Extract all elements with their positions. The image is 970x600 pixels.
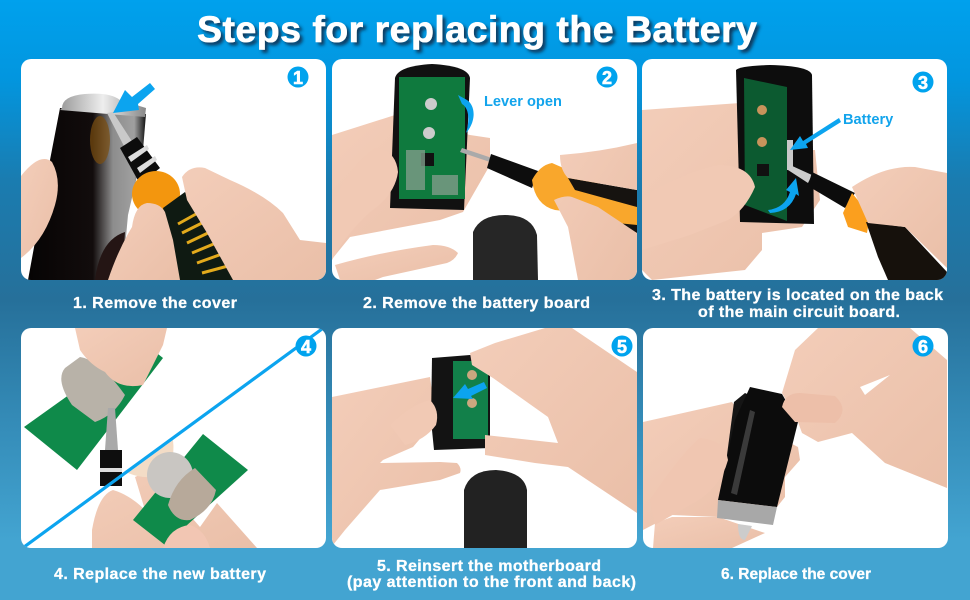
curved arrow [768, 178, 799, 213]
lower device [473, 215, 538, 280]
number badge 4: 4 [301, 337, 311, 357]
caption 6: 6. Replace the cover [721, 566, 871, 583]
lower holder [168, 468, 216, 520]
number badge 1 [288, 66, 308, 88]
thumb [332, 148, 398, 260]
label: lever open: Lever open [484, 94, 562, 110]
number badge 3: 3 [918, 73, 928, 93]
tool [100, 408, 122, 486]
right hand [554, 143, 637, 280]
lower hand [92, 470, 257, 548]
coin battery [147, 452, 193, 498]
caption 3 [652, 287, 943, 321]
arrow [453, 382, 487, 399]
lower device [464, 470, 527, 548]
title: Steps for replacing the Battery [197, 8, 757, 50]
right fingers [182, 167, 326, 280]
lower board [133, 434, 248, 545]
right hand [782, 328, 947, 488]
caption 5 [347, 558, 636, 591]
panel: step 4 replace the battery [21, 328, 326, 548]
device and board [431, 355, 490, 450]
label: battery: Battery [843, 112, 894, 128]
thumb [738, 168, 755, 211]
curved arrow [458, 95, 474, 133]
upper board [24, 342, 163, 470]
divider [24, 329, 322, 547]
caption 3: of the main circuit board. [698, 304, 900, 321]
number badge 1: 1 [293, 68, 303, 88]
number badge 6 [912, 336, 934, 357]
lower finger [653, 517, 765, 548]
right hand [852, 167, 947, 268]
device and board [390, 64, 470, 210]
number badge 4 [296, 336, 316, 357]
right hand [470, 328, 637, 513]
gap in fingers [860, 375, 890, 395]
device and board [736, 65, 814, 224]
left hand [332, 115, 490, 260]
caption 2: 2. Remove the battery board [363, 295, 590, 312]
panel: step 6 replace the cover [643, 328, 948, 548]
number badge 3 [912, 72, 934, 93]
left fingers [21, 159, 58, 258]
screwdriver [788, 165, 947, 280]
arrow [113, 83, 155, 113]
caption 1: 1. Remove the cover [73, 295, 237, 312]
device with silver cap [28, 94, 146, 280]
panel: step 3 battery location [642, 59, 947, 280]
thumb [390, 400, 437, 445]
number badge 2 [596, 66, 618, 88]
finger above coin [128, 440, 173, 477]
left hand [642, 103, 820, 280]
left hand [332, 377, 461, 548]
device [717, 387, 798, 540]
upper fingers [75, 328, 167, 386]
number badge 5: 5 [617, 337, 627, 357]
screwdriver [460, 148, 637, 233]
number badge 2: 2 [602, 68, 612, 88]
screwdriver [107, 112, 240, 280]
number badge 5 [612, 336, 632, 357]
thumb left [650, 438, 728, 525]
thumb [108, 203, 180, 280]
number badge 6: 6 [918, 337, 928, 357]
caption 5: (pay attention to the front and back) [347, 574, 636, 591]
caption 3: 3. The battery is located on the back [652, 287, 943, 304]
left hand [643, 402, 800, 530]
caption 4: 4. Replace the new battery [54, 566, 266, 583]
straight arrow [790, 118, 841, 150]
index fingertip [782, 393, 842, 423]
caption 5: 5. Reinsert the motherboard [377, 558, 601, 575]
upper holder [61, 357, 125, 422]
panel: step 1 remove the cover [21, 59, 326, 280]
lower finger [335, 245, 458, 280]
panel: step 2 remove the battery board [332, 59, 637, 280]
finger [163, 525, 210, 548]
panel: step 5 reinsert the motherboard [332, 328, 637, 548]
